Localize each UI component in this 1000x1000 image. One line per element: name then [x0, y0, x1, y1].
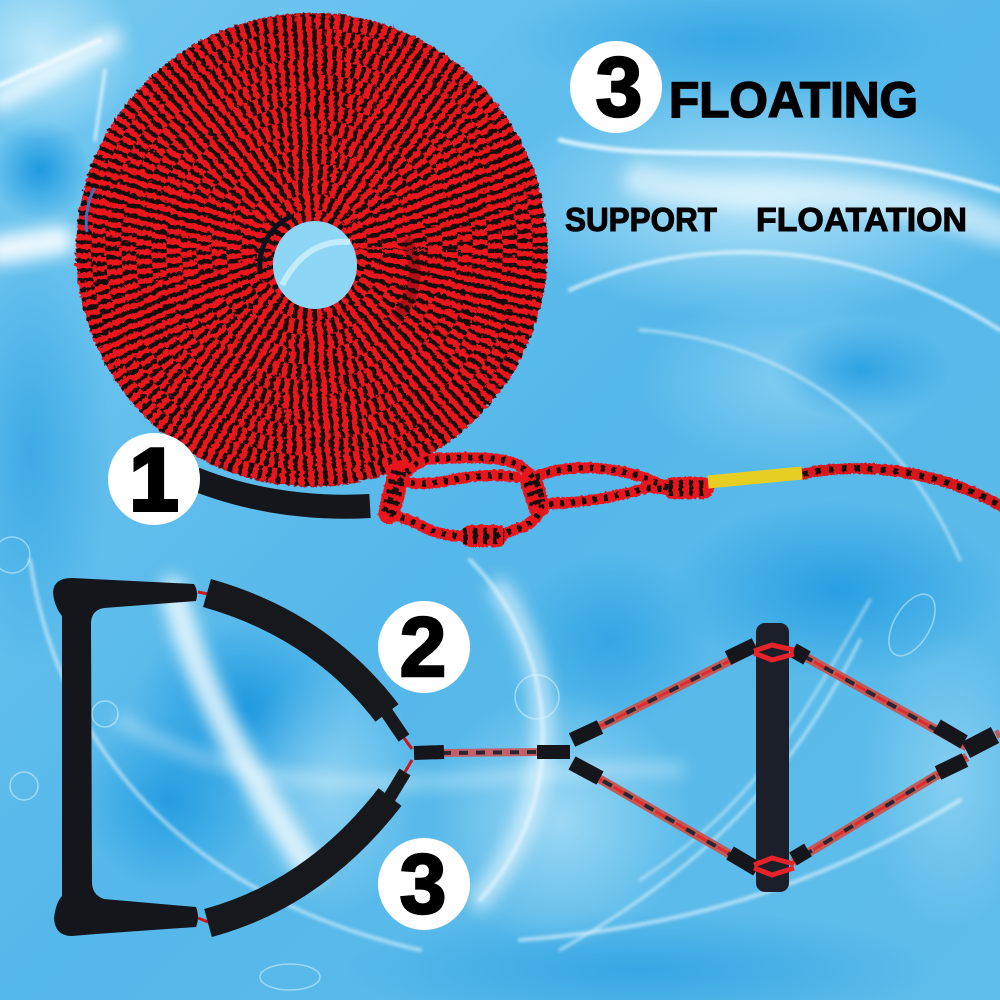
yellow splice sleeve: [708, 473, 802, 482]
handle: foam floats: [198, 592, 412, 923]
badge 3 bottom: [378, 837, 470, 931]
badge 1: [108, 430, 200, 529]
badge 1: 1: [130, 430, 178, 529]
label: support: SUPPORT: [565, 201, 717, 238]
badge 3 top: [570, 40, 662, 134]
badge 2: [378, 600, 470, 694]
badge 3 bottom: 3: [400, 837, 446, 931]
badge 2: 2: [400, 600, 446, 694]
handle: diamond bridle: [572, 623, 1000, 892]
grip bar: [756, 623, 789, 892]
badge 3 top: 3: [596, 40, 642, 134]
handle: center rope: [414, 752, 570, 753]
heading: floating: FLOATING: [669, 72, 918, 128]
rope coil: [75, 11, 545, 485]
black foam sleeve: [195, 479, 370, 507]
rope tail with loops: [384, 457, 1000, 535]
label: floatation: FLOATATION: [756, 201, 967, 238]
handle: left grip: [53, 578, 198, 936]
